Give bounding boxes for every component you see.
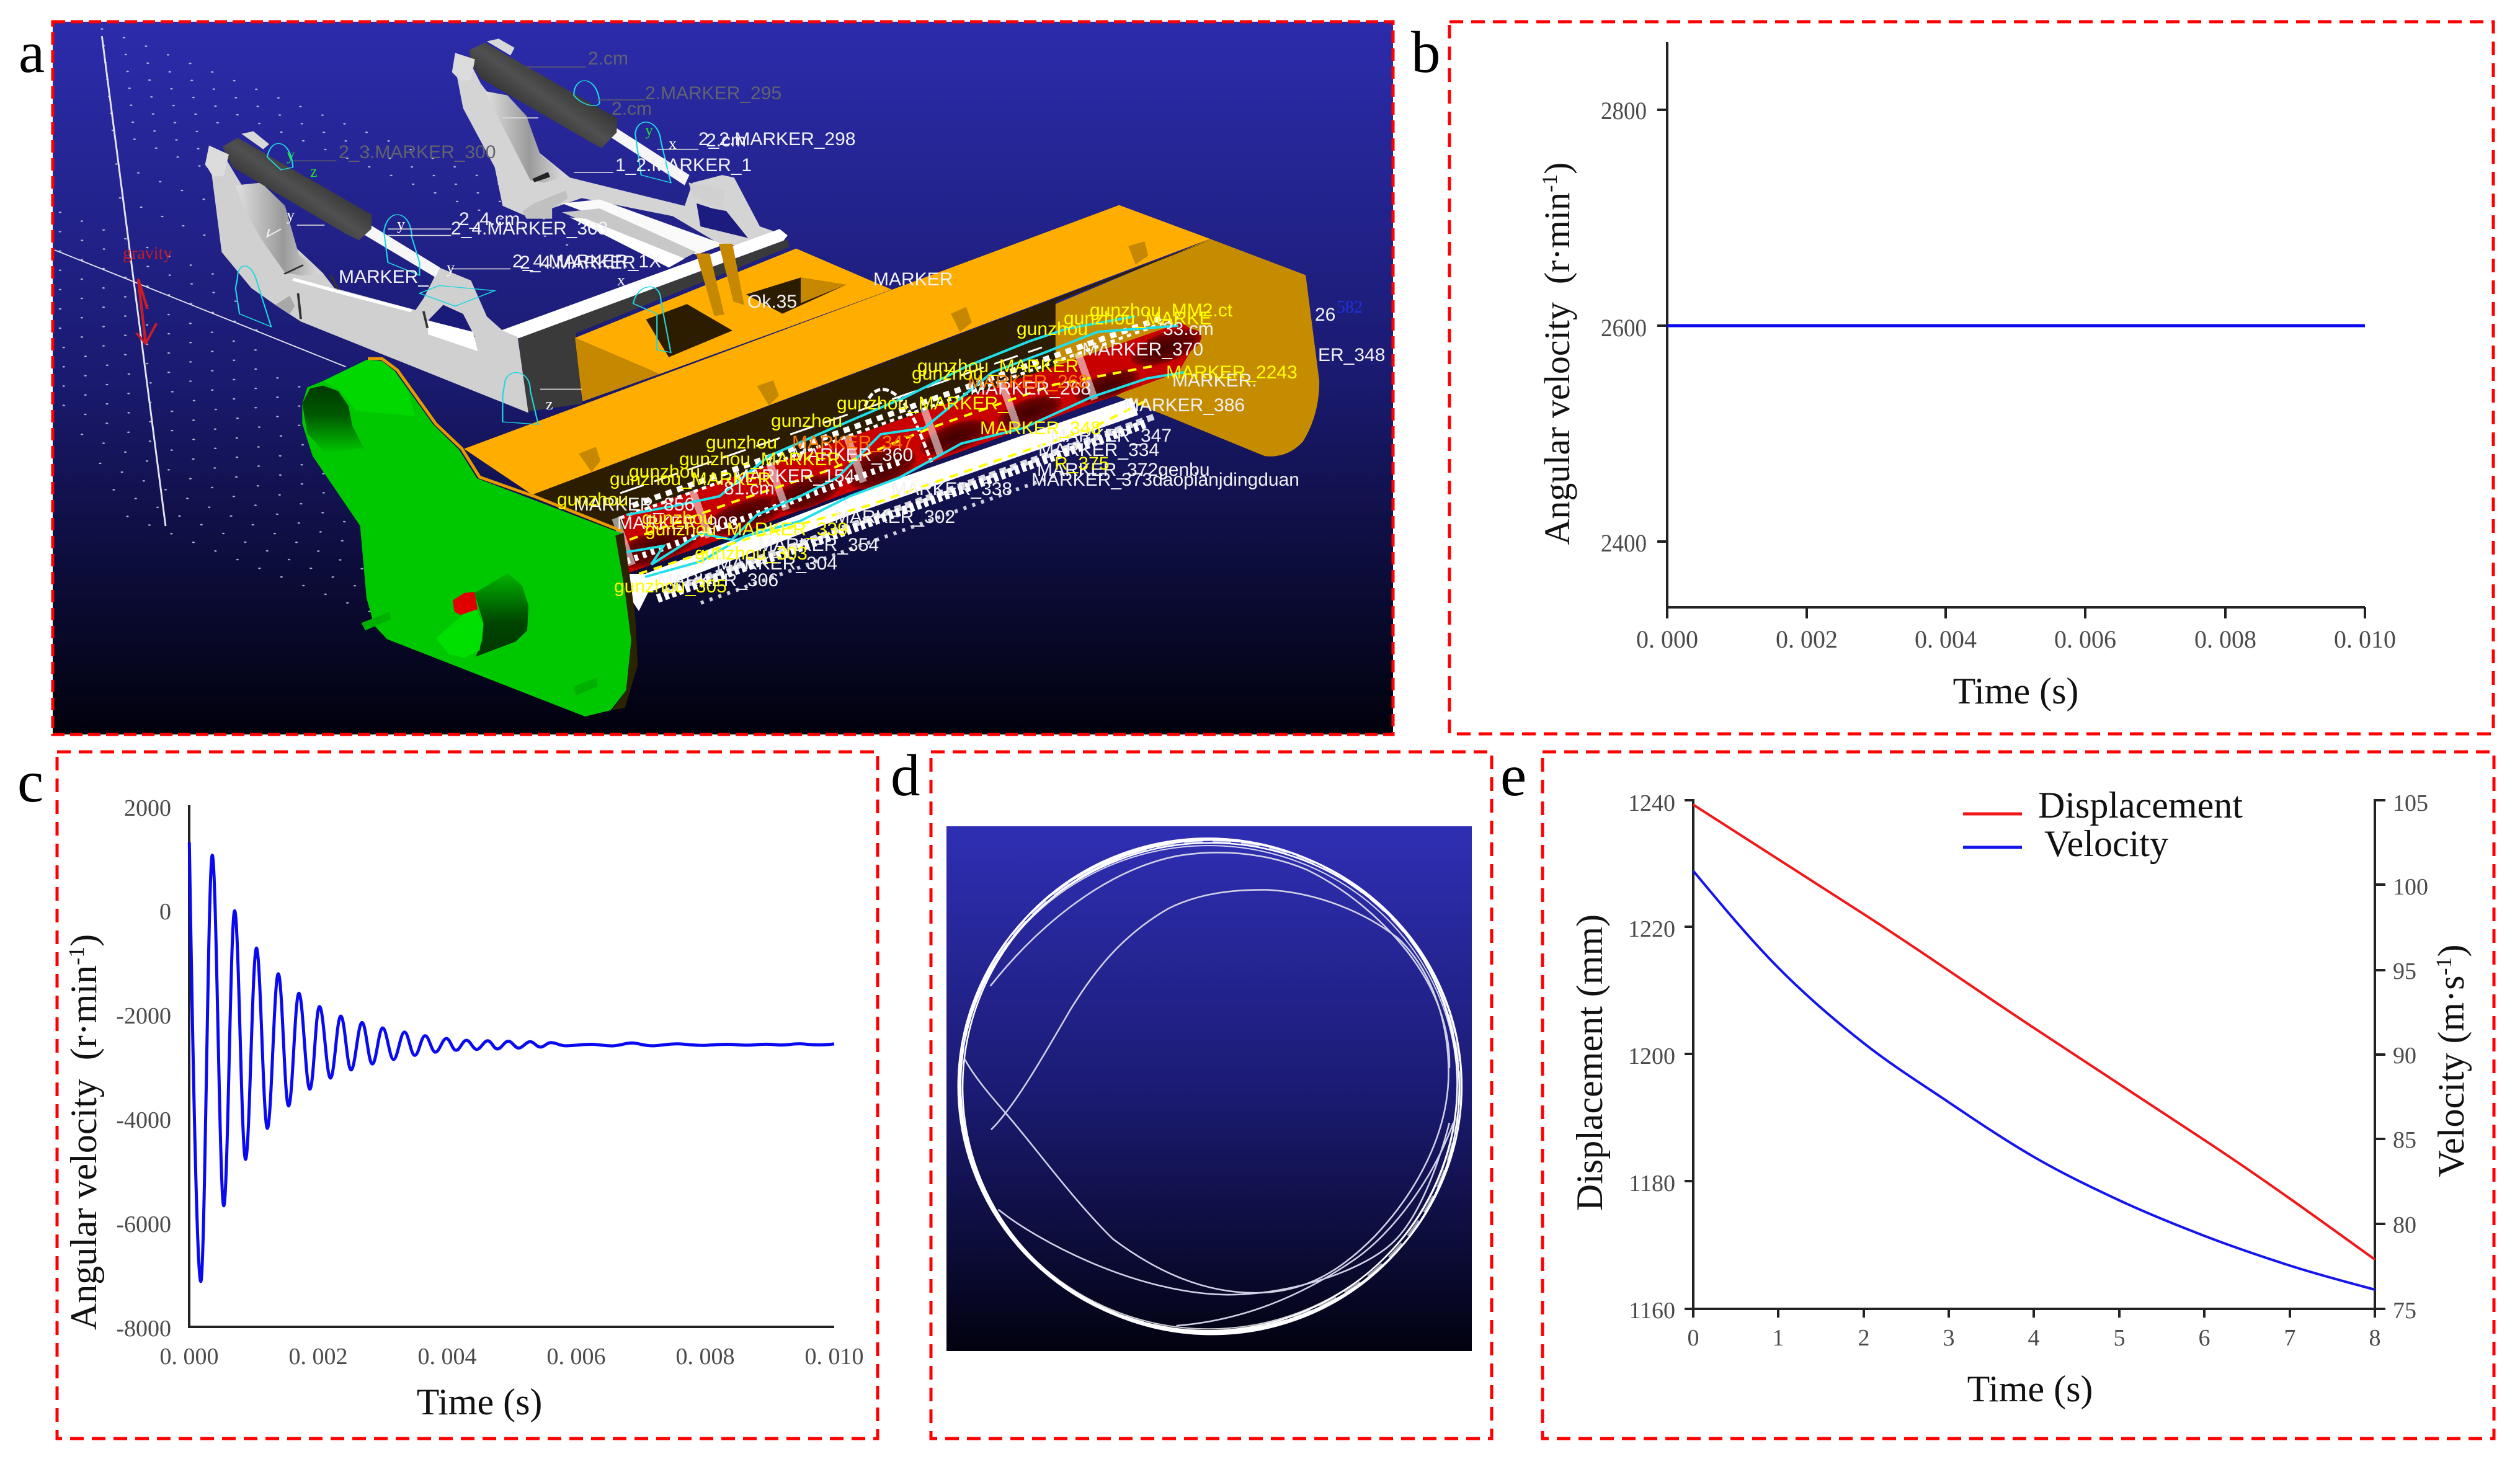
e left tick labels: 1160 bbox=[1629, 1298, 1675, 1324]
axis glyphs at markers: y bbox=[287, 206, 295, 224]
marker labels: 582 bbox=[1337, 298, 1363, 317]
b y tick labels bbox=[1601, 97, 1647, 557]
displacement curve bbox=[1693, 805, 2375, 1260]
c axes bbox=[189, 805, 834, 1327]
marker labels: gunzhou bbox=[642, 508, 713, 529]
e x tick labels: 5 bbox=[2114, 1325, 2125, 1351]
marker labels: 2.cm bbox=[612, 99, 652, 119]
lift frame with brackets and cylinders bbox=[205, 38, 790, 413]
e right y axis title: -1 bbox=[2431, 957, 2456, 976]
e right tick labels: 95 bbox=[2393, 958, 2416, 984]
e right tick labels: 100 bbox=[2393, 874, 2428, 900]
marker labels: gunzhou bbox=[557, 489, 628, 510]
axis glyphs at markers: x bbox=[617, 271, 625, 289]
marker labels: 2_4.MARKER_303 bbox=[451, 218, 608, 239]
marker labels: gunzhou_MM2.ct bbox=[1090, 300, 1233, 321]
axis glyphs at markers: y bbox=[397, 215, 405, 233]
model viewport background bbox=[53, 22, 1393, 734]
far hydraulic cylinder bbox=[452, 38, 724, 210]
plate orange rim bbox=[368, 359, 622, 531]
b x tick labels bbox=[1636, 625, 2396, 653]
c y tick labels: -2000 bbox=[116, 1003, 171, 1029]
marker labels: MARKER_154 bbox=[734, 466, 855, 486]
b x tick labels: 0. 006 bbox=[2054, 625, 2116, 653]
marker labels: MARKER_347 bbox=[792, 432, 913, 453]
e legend: Displacement bbox=[2038, 785, 2243, 826]
b y axis title: ) bbox=[1537, 162, 1577, 174]
beam underside bbox=[532, 240, 1210, 536]
frame beam bbox=[501, 229, 790, 411]
marker labels: gunzhou bbox=[629, 462, 700, 482]
e x tick labels: 1 bbox=[1773, 1325, 1784, 1351]
cyan joint markers bbox=[236, 81, 671, 424]
inner transition curves bbox=[964, 852, 1453, 1326]
d viewport background bbox=[946, 826, 1472, 1351]
e x tick labels: 7 bbox=[2284, 1325, 2296, 1351]
axis glyphs at markers: z bbox=[546, 395, 553, 413]
panel d: roller trajectory plot bbox=[931, 752, 1492, 1439]
axis glyphs at markers: z bbox=[310, 163, 318, 181]
marker labels: MARKER. bbox=[1172, 370, 1257, 391]
marker labels: MARKER_354 bbox=[758, 535, 879, 555]
c x tick labels: 0. 004 bbox=[418, 1344, 476, 1370]
marker labels: gunzhou bbox=[1017, 319, 1088, 339]
marker labels: MARKER_908 bbox=[617, 513, 738, 533]
marker labels: MARKER_268 bbox=[968, 372, 1089, 392]
e right tick labels: 80 bbox=[2393, 1212, 2416, 1238]
marker labels: MARKER_347 bbox=[1051, 426, 1172, 446]
e legend: Velocity bbox=[2044, 823, 2168, 864]
roller gaps bbox=[620, 354, 1147, 543]
panel label d: d bbox=[891, 743, 920, 808]
marker labels: gunzhou_MARKER bbox=[610, 469, 771, 489]
e x axis title: Time (s) bbox=[1967, 1368, 2093, 1409]
e right tick labels bbox=[2393, 790, 2428, 1324]
b x tick labels: 0. 010 bbox=[2334, 625, 2396, 653]
panel e border bbox=[1543, 752, 2494, 1439]
marker labels: 2_4.cm bbox=[459, 209, 520, 230]
main orange beam bbox=[464, 205, 1210, 494]
e x tick labels: 2 bbox=[1858, 1325, 1869, 1351]
panel label c: c bbox=[17, 749, 43, 814]
outer orbit rings bbox=[955, 831, 1465, 1342]
e curves bbox=[1693, 805, 2375, 1290]
c y tick labels: 2000 bbox=[124, 795, 171, 821]
near hydraulic cylinder bbox=[205, 132, 440, 277]
marker labels: MARKER_370 bbox=[1082, 339, 1203, 360]
e right tick labels: 75 bbox=[2393, 1298, 2416, 1324]
panel a: 3D machine model bbox=[53, 22, 1393, 734]
b x axis title: Time (s) bbox=[1953, 671, 2078, 712]
marker labels: 2_4.MARKER_1X bbox=[512, 251, 661, 272]
panel d border bbox=[931, 752, 1492, 1439]
panel b border bbox=[1449, 22, 2493, 734]
e left tick labels: 1240 bbox=[1628, 790, 1675, 816]
velocity curve bbox=[1693, 871, 2375, 1290]
marker labels bbox=[123, 48, 1385, 597]
e x tick labels: 3 bbox=[1943, 1325, 1955, 1351]
marker labels: MARKER_360 bbox=[792, 445, 913, 465]
dark roller shading bbox=[608, 321, 1206, 577]
c y tick labels: -6000 bbox=[116, 1211, 171, 1238]
marker labels: MARKER_ bbox=[339, 267, 429, 287]
marker labels: MARKER_304 bbox=[716, 553, 837, 574]
c y axis title: -1 bbox=[64, 947, 89, 965]
leader lines bbox=[297, 118, 698, 389]
e x tick labels: 8 bbox=[2369, 1325, 2380, 1351]
e right tick labels: 90 bbox=[2393, 1043, 2416, 1069]
e left y axis title: Displacement (mm) bbox=[1569, 914, 1610, 1211]
c damped oscillation curve bbox=[189, 842, 834, 1282]
panel label b: b bbox=[1411, 19, 1440, 85]
panel c border bbox=[57, 752, 878, 1439]
marker labels: 1_2.MARKER_1 bbox=[615, 155, 752, 176]
marker labels: 2_3.MARKER_300 bbox=[339, 142, 496, 163]
e axes bbox=[1685, 799, 2385, 1318]
marker labels: MARKER_338 bbox=[891, 479, 1012, 499]
e left tick labels bbox=[1628, 790, 1675, 1324]
axis glyphs at markers: x bbox=[669, 135, 677, 153]
marker labels: gunzhou_MARKER_ bbox=[837, 393, 1009, 414]
red roller band bbox=[623, 323, 1200, 574]
gray leader lines bbox=[293, 67, 645, 161]
lower belt opening bbox=[474, 573, 528, 657]
axis glyphs at markers bbox=[287, 121, 677, 413]
marker labels: MARKER_372genbu bbox=[1037, 460, 1210, 480]
marker labels: 26 bbox=[1315, 305, 1335, 325]
marker labels: gunzhou_MARKER bbox=[917, 356, 1079, 377]
marker labels: MARKER_348 bbox=[980, 418, 1101, 439]
axis glyphs at markers: y bbox=[447, 259, 455, 277]
gravity arrow bbox=[136, 279, 156, 344]
e left tick labels: 1220 bbox=[1628, 916, 1675, 942]
panel a border bbox=[53, 22, 1393, 734]
green side plate assembly bbox=[302, 359, 638, 716]
roller assembly and marker clutter bbox=[608, 316, 1206, 611]
e x tick labels bbox=[1687, 1325, 2380, 1351]
marker labels: ER_348 bbox=[1318, 345, 1385, 365]
b y axis title: Angular velocity (r·min bbox=[1537, 192, 1577, 545]
marker labels: MARKER_268 bbox=[970, 378, 1091, 399]
marker labels: gunzhou_303 bbox=[695, 543, 808, 564]
marker labels: 81.cm bbox=[724, 478, 775, 499]
marker labels: gunzhou bbox=[771, 411, 842, 431]
c y tick labels: 0 bbox=[159, 899, 171, 925]
near bracket bbox=[206, 149, 528, 413]
marker labels: MARKER_2243 bbox=[1166, 362, 1298, 383]
b y tick labels: 2800 bbox=[1601, 97, 1647, 125]
white speckle strips bbox=[620, 316, 1178, 603]
e legend bbox=[1963, 785, 2243, 864]
b axes bbox=[1657, 42, 2365, 618]
c y axis title: Angular velocity (r·min bbox=[63, 965, 104, 1330]
c x tick labels: 0. 010 bbox=[805, 1344, 863, 1370]
plate tabs bbox=[362, 612, 598, 695]
marker labels: R_375 bbox=[1054, 453, 1109, 474]
marker labels: 2.cm bbox=[588, 48, 628, 69]
marker labels: MARKER_334 bbox=[1038, 440, 1159, 460]
blade tip bbox=[630, 574, 657, 611]
e x tick labels: 0 bbox=[1687, 1325, 1699, 1351]
orange end plate bbox=[1056, 239, 1319, 457]
plate right edge bbox=[612, 533, 638, 710]
c x axis title: Time (s) bbox=[417, 1381, 542, 1422]
e x tick labels: 4 bbox=[2028, 1325, 2039, 1351]
b data line bbox=[1667, 324, 2365, 328]
panel label e: e bbox=[1500, 743, 1526, 808]
b y tick labels: 2400 bbox=[1601, 529, 1647, 557]
yellow marker strokes bbox=[630, 366, 1154, 574]
marker labels: gunzhou_MARKE bbox=[1064, 308, 1211, 329]
ground dot grid bbox=[60, 29, 582, 613]
axis glyphs at markers: y bbox=[645, 121, 653, 139]
b x tick labels: 0. 004 bbox=[1915, 625, 1977, 653]
e left tick labels: 1200 bbox=[1628, 1043, 1675, 1069]
far bracket bbox=[455, 65, 786, 267]
marker labels: Ok.35 bbox=[747, 292, 797, 312]
beam lugs bbox=[579, 241, 1148, 472]
e right tick labels: 105 bbox=[2393, 790, 2428, 816]
c y axis title: ) bbox=[63, 934, 104, 947]
e right y axis title: ) bbox=[2431, 945, 2472, 957]
b x tick labels: 0. 000 bbox=[1636, 625, 1698, 653]
marker labels: gunzhou_305 bbox=[614, 576, 727, 597]
marker labels: gunzhou_MARKER_339 bbox=[645, 519, 848, 540]
e right y axis title: Velocity (m·s bbox=[2431, 976, 2472, 1177]
cyan marker strokes bbox=[626, 316, 1185, 577]
e x tick labels: 6 bbox=[2198, 1325, 2211, 1351]
e left tick labels: 1180 bbox=[1629, 1171, 1675, 1197]
marker labels: gravity bbox=[123, 244, 172, 263]
marker labels: 2.MARKER_295 bbox=[645, 83, 781, 104]
upper belt opening bbox=[302, 386, 364, 453]
c y tick labels: -4000 bbox=[116, 1107, 171, 1133]
c x tick labels: 0. 008 bbox=[676, 1344, 734, 1370]
c x tick labels: 0. 006 bbox=[547, 1344, 605, 1370]
marker labels: MARKER_306 bbox=[657, 570, 778, 591]
marker labels: MARKER_373daopianjdingduan bbox=[1031, 470, 1299, 490]
c x tick labels: 0. 000 bbox=[160, 1344, 218, 1370]
panel e: displacement and velocity chart bbox=[1543, 752, 2494, 1439]
drive pin bbox=[453, 592, 478, 615]
c x tick labels bbox=[160, 1344, 863, 1370]
marker labels: gunzhou bbox=[912, 364, 983, 384]
c y tick labels: -8000 bbox=[116, 1316, 171, 1342]
panel c: damped angular velocity chart bbox=[57, 752, 878, 1439]
marker labels: MARKER_302 bbox=[834, 507, 955, 527]
marker labels: 2_2.MARKER_298 bbox=[698, 129, 855, 149]
marker labels: MARKER_856 bbox=[574, 494, 695, 515]
axis glyphs at markers: y bbox=[287, 146, 295, 164]
orange implement bbox=[464, 205, 1319, 536]
b y axis title: -1 bbox=[1538, 174, 1562, 192]
c y tick labels bbox=[116, 795, 171, 1342]
marker labels: gunzhou_MARKER bbox=[679, 449, 840, 470]
b y tick labels: 2600 bbox=[1601, 314, 1647, 342]
marker labels: gunzhou bbox=[706, 432, 777, 453]
marker labels: 2.cm bbox=[706, 130, 746, 151]
gravity axis lines bbox=[55, 36, 345, 526]
marker labels: 33.cm bbox=[1163, 319, 1214, 339]
e right tick labels: 85 bbox=[2393, 1127, 2416, 1153]
marker labels: 2_4.MARKER bbox=[520, 252, 636, 273]
panel label a: a bbox=[19, 19, 45, 85]
marker labels: MARKER bbox=[873, 269, 953, 290]
white blade band bbox=[639, 406, 1135, 586]
panel b: constant angular velocity chart bbox=[1449, 22, 2493, 734]
c x tick labels: 0. 002 bbox=[289, 1344, 347, 1370]
d trajectory curves bbox=[955, 831, 1465, 1342]
b x tick labels: 0. 002 bbox=[1776, 625, 1838, 653]
hitch block bbox=[575, 244, 892, 401]
lower lobe highlight bbox=[436, 605, 484, 658]
plate outer shape bbox=[302, 360, 631, 716]
b x tick labels: 0. 008 bbox=[2194, 625, 2256, 653]
upper light band bbox=[323, 360, 416, 416]
marker labels: MARKER_386 bbox=[1124, 395, 1245, 416]
